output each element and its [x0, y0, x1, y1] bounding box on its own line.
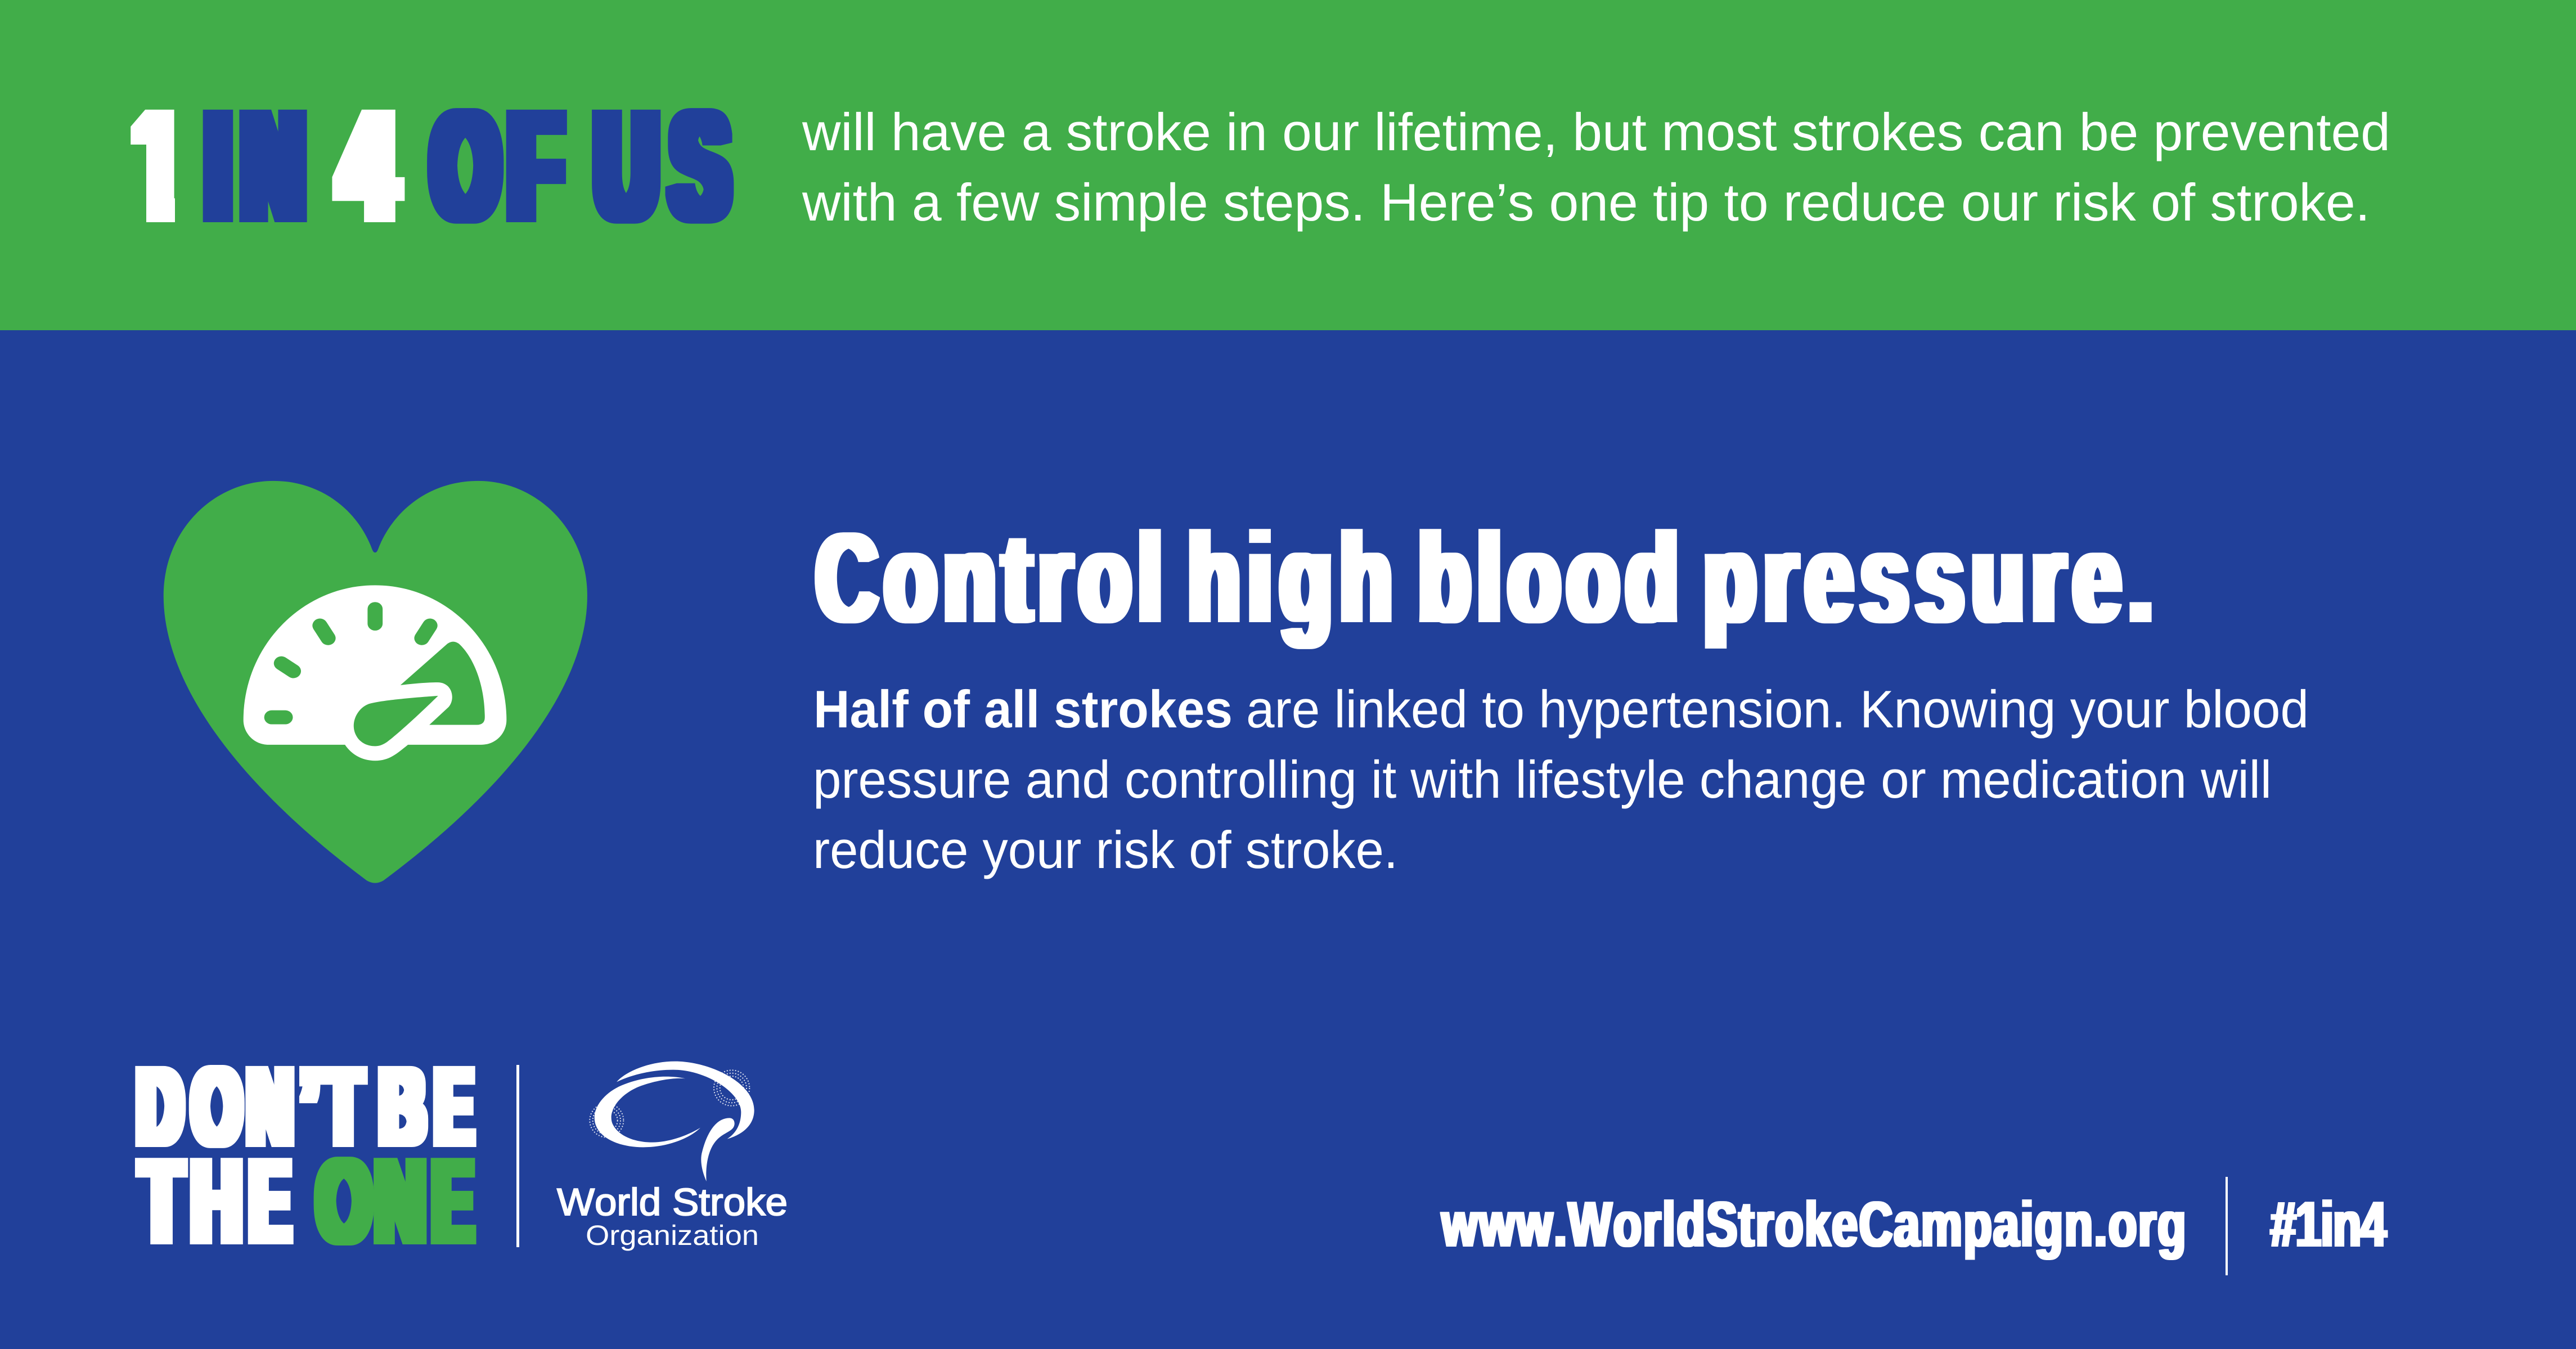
logo: don't be the one: H	[191, 1136, 241, 1266]
text: hashtag: #1in4	[2271, 1189, 2386, 1260]
text block: banner intro sentence: will have a stroke in our lifetime, but most strokes can be prevented	[802, 102, 2390, 161]
title: 1 in 4 of us: N	[242, 81, 304, 251]
heading: control high blood pressure: Control	[816, 506, 1170, 649]
text block: hypertension explanation: Half of all strokes	[813, 680, 1233, 739]
divider between website and hashtag	[2226, 1177, 2228, 1275]
logo: don't be the one: E	[250, 1136, 290, 1266]
logo: don't be the one: O	[317, 1136, 371, 1266]
heading: control high blood pressure: blood	[1419, 506, 1685, 649]
title: 1 in 4 of us: U	[596, 81, 657, 251]
logo: don't be the one: T	[141, 1136, 183, 1266]
heading: control high blood pressure: high	[1188, 506, 1400, 649]
logo: world stroke organization	[557, 1062, 788, 1251]
title: 1 in 4 of us: S	[672, 81, 728, 251]
icon: brain swoosh mark	[590, 1062, 754, 1181]
logo: don't be the one	[137, 1046, 473, 1266]
logo: don't be the one: N	[248, 1046, 293, 1167]
title: 1 in 4 of us: 4	[340, 81, 397, 251]
text block: banner intro sentence	[802, 102, 2390, 232]
title: 1 in 4 of us: I	[206, 81, 230, 251]
title: 1 in 4 of us: 1	[134, 81, 181, 251]
logo: don't be the one: E	[435, 1046, 472, 1167]
logo: don't be the one: B	[380, 1046, 425, 1167]
logo: don't be the one: D	[137, 1046, 182, 1167]
text: organization: Organization	[586, 1220, 759, 1251]
logo: don't be the one: T	[324, 1046, 362, 1167]
text block: hypertension explanation: reduce your risk of stroke.	[813, 820, 1398, 879]
icon: gauge ticks	[272, 609, 430, 717]
icon: white gauge dial	[244, 585, 506, 761]
heading: control high blood pressure	[816, 506, 2161, 649]
logo: don't be the one: E	[433, 1136, 473, 1266]
logo: don't be the one: ’	[301, 1046, 318, 1167]
icon: heart with blood pressure gauge	[164, 481, 587, 883]
title: 1 in 4 of us	[131, 108, 734, 224]
heading: control high blood pressure: pressure.	[1704, 506, 2161, 649]
text: campaign website: www.WorldStrokeCampaign.org	[1441, 1189, 2186, 1260]
panel: green top banner	[0, 0, 2576, 330]
text block: hypertension explanation: are linked to hypertension. Knowing your blood	[1246, 680, 2309, 739]
title: 1 in 4 of us: F	[510, 81, 561, 251]
logo: don't be the one: N	[375, 1136, 425, 1266]
icon: gauge red zone wedge	[401, 642, 485, 725]
text block: banner intro sentence: with a few simple steps. Here’s one tip to reduce our risk of stroke.	[802, 173, 2370, 232]
text block: hypertension explanation: pressure and controlling it with lifestyle change or medication will	[813, 750, 2272, 809]
title: 1 in 4 of us: O	[433, 81, 498, 251]
icon: gauge needle	[354, 696, 438, 746]
icon: green heart	[164, 481, 587, 883]
divider between logos	[516, 1065, 519, 1247]
text block: hypertension explanation	[813, 680, 2309, 879]
logo: don't be the one: O	[192, 1046, 241, 1167]
text: world stroke: World Stroke	[557, 1181, 788, 1224]
